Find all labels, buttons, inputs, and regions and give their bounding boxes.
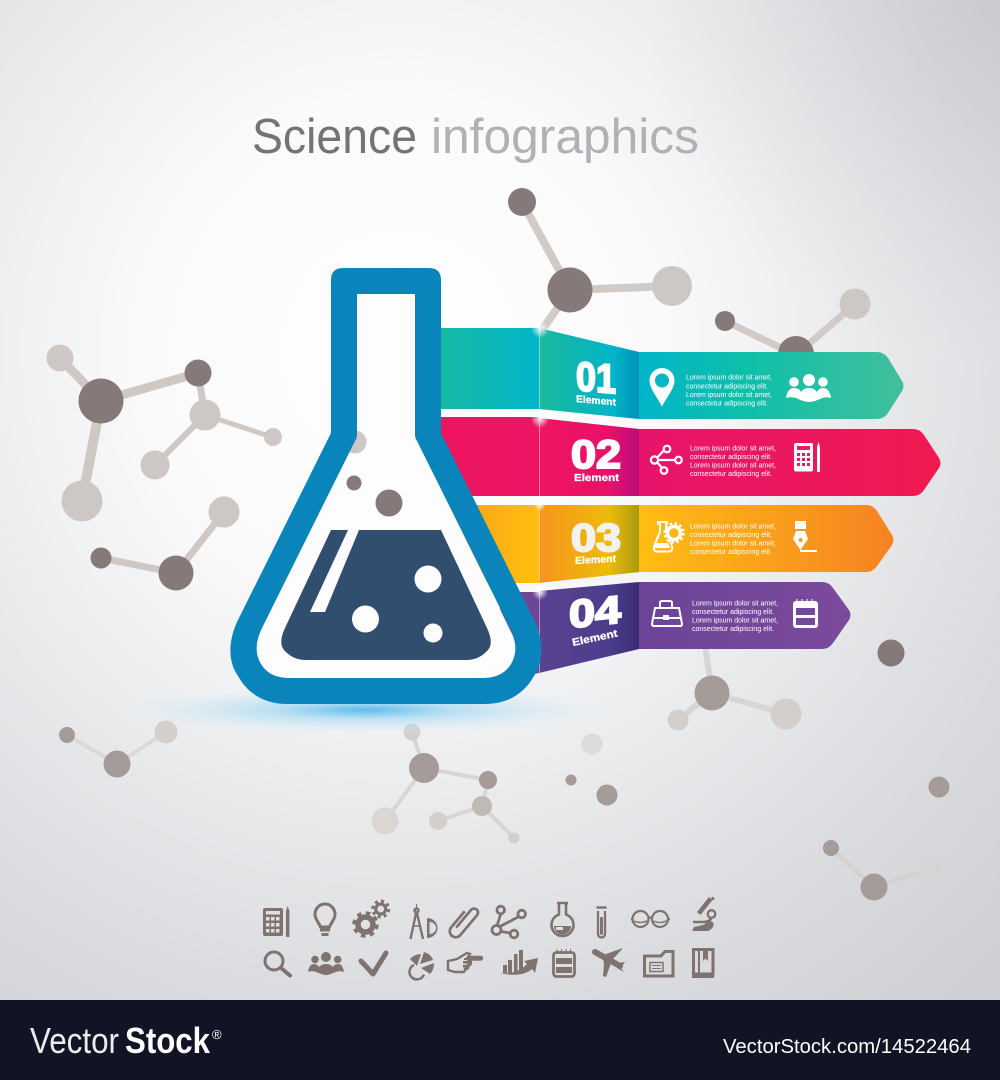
icon: map pin [650, 368, 674, 406]
icon: people [786, 374, 831, 402]
ribbon 2 mid fold [539, 418, 639, 496]
icon: people [308, 952, 344, 975]
ribbon 1 number: 01 [576, 353, 616, 402]
footer logo [30, 1020, 222, 1061]
ribbon 1 text: consectetur adipiscing elit. [686, 400, 768, 407]
title [252, 110, 699, 164]
ribbon 1 [420, 328, 904, 419]
icon: folder [644, 952, 673, 976]
icon: share nodes [651, 446, 682, 474]
ribbon 4 [500, 582, 850, 680]
molecule: lower left [59, 720, 178, 778]
ribbon 2 arrow [639, 429, 940, 496]
ribbon 3 text: consectetur adipiscing elit. [690, 532, 772, 539]
ribbon 1 text: Lorem ipsum dolor sit amet, [686, 374, 772, 382]
ribbon 4 text [692, 600, 778, 633]
icon: calculator [263, 906, 289, 937]
icon: flask and gear [653, 522, 684, 552]
title: infographics [431, 110, 699, 164]
ribbon 4 text: Lorem ipsum dolor sit amet, [692, 600, 778, 608]
footer url: VectorStock.com/14522464 [723, 1036, 971, 1058]
ribbon 1 arrow [639, 352, 904, 419]
ribbon 3 text: Lorem ipsum dolor sit amet, [690, 524, 776, 530]
fold highlights [531, 320, 549, 673]
icon: light bulb [315, 904, 335, 936]
flask interior [257, 294, 517, 678]
ribbon 4 arrow [639, 582, 850, 649]
ribbon 2 number: 02 [571, 433, 621, 477]
icon: briefcase [652, 601, 682, 626]
icon: notepad [554, 949, 574, 976]
icon: network [492, 906, 526, 938]
molecule: left large [46, 344, 282, 522]
ribbon 4 text: consectetur adipiscing elit. [692, 626, 774, 633]
footer logo: Vector [30, 1020, 119, 1061]
ribbon 3 [420, 505, 894, 583]
ribbon 4 mid fold [539, 582, 639, 673]
icon: airplane [595, 948, 625, 977]
ribbon 1 back fold [420, 328, 539, 409]
light atom behind flask [344, 430, 366, 454]
ribbon 4 text: Lorem ipsum dolor sit amet, [692, 618, 778, 624]
ribbon 4 label: Element [571, 628, 619, 649]
ribbon 1 text: Lorem ipsum dolor sit amet, [686, 392, 772, 399]
ribbon 2 text: Lorem ipsum dolor sit amet, [690, 446, 776, 452]
molecule: center right [668, 645, 802, 730]
ribbon 3 back fold [420, 505, 539, 583]
icon: pointing hand [448, 953, 482, 972]
icon: magnifier [265, 952, 290, 976]
ribbon 2 back fold [420, 417, 539, 496]
ribbon 4 text: consectetur adipiscing elit. [692, 609, 774, 616]
icon: notepad [793, 599, 818, 628]
footer logo: Stock [125, 1020, 211, 1061]
ribbon 2 [420, 417, 940, 496]
ribbon 1 mid fold [539, 328, 639, 419]
ribbon 3 mid fold [539, 505, 639, 583]
icon: microscope [692, 896, 715, 931]
bubbles in liquid [352, 566, 442, 642]
ribbon 2 text [690, 446, 776, 478]
ribbon 3 label: Element [575, 554, 617, 567]
icon: round flask [552, 903, 574, 936]
footer bar [0, 1000, 1000, 1080]
ribbon 1 label: Element [576, 394, 617, 409]
icon: calculator and pen [794, 442, 820, 472]
icon: book [692, 949, 714, 978]
ribbon 2 label: Element [574, 472, 620, 484]
footer logo: ® [212, 1027, 222, 1042]
ribbon 3 text [690, 524, 776, 556]
icon: fountain pen [793, 521, 817, 552]
molecule: top right [715, 288, 870, 372]
icon set: bottom [263, 896, 715, 979]
liquid [281, 530, 491, 660]
ribbon 1 text [686, 374, 772, 407]
icon: glasses [631, 911, 670, 927]
ribbon 1 text: consectetur adipiscing elit. [686, 383, 768, 390]
molecule: left small [90, 496, 240, 590]
ribbon 2 text: consectetur adipiscing elit. [690, 471, 772, 478]
icon: paper clip [447, 904, 480, 940]
ribbon 2 text: Lorem ipsum dolor sit amet, [690, 462, 776, 470]
loose atoms [566, 640, 950, 806]
ribbon 4 number: 04 [569, 589, 621, 637]
rising bubbles [346, 476, 402, 516]
molecule: bottom right [823, 840, 942, 900]
molecule: center bottom [372, 724, 520, 844]
ribbon 3 text: consectetur adipiscing elit. [690, 549, 772, 556]
flask body [230, 268, 541, 704]
icon: drafting compass [410, 904, 438, 939]
flask shadow [115, 686, 615, 734]
molecule: top center [508, 188, 692, 340]
liquid highlight [310, 530, 359, 612]
ribbon 2 text: consectetur adipiscing elit. [690, 454, 772, 461]
ribbon 3 text: Lorem ipsum dolor sit amet, [690, 540, 776, 548]
flask [230, 268, 541, 704]
icon: pie chart [409, 952, 434, 979]
ribbon 3 number: 03 [571, 517, 621, 560]
ribbon 4 back fold [500, 592, 539, 680]
icon: check mark [361, 953, 386, 974]
icon: test tube [596, 908, 606, 938]
title: Science [252, 110, 417, 164]
ribbon 3 arrow [639, 505, 894, 572]
icon: bar chart [499, 950, 538, 975]
icon: gears [354, 901, 389, 936]
